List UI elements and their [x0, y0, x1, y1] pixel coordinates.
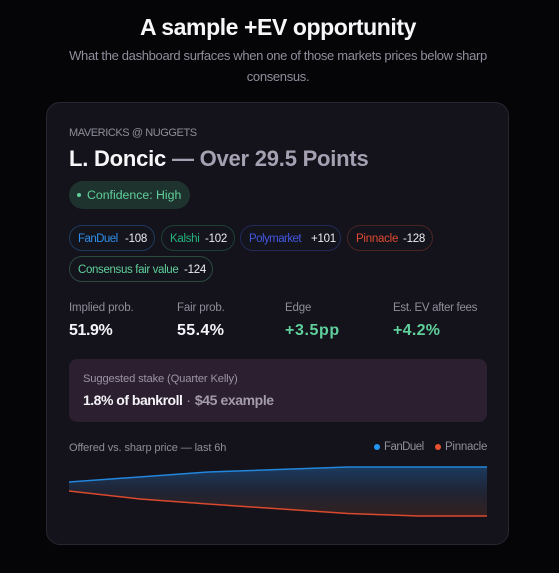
line chart [69, 466, 487, 517]
stat: implied probability [69, 302, 134, 339]
confidence text: Confidence: High [87, 188, 181, 202]
pill: Polymarket price: Polymarket [249, 233, 301, 245]
stat: edge: +3.5pp [285, 322, 340, 339]
chart caption: Offered vs. sharp price — last 6h [69, 442, 226, 454]
FanDuel line [69, 467, 487, 482]
panel: suggested stake [69, 359, 487, 422]
pill: consensus fair value: Consensus fair value [78, 264, 178, 276]
legend: Pinnacle: Pinnacle [445, 441, 487, 453]
pill: Kalshi price: Kalshi [170, 233, 200, 245]
stat: implied probability: 51.9% [69, 322, 112, 339]
stake label: Suggested stake (Quarter Kelly) [83, 373, 238, 385]
stat: fair probability [177, 302, 225, 339]
pill: Kalshi price: -102 [205, 233, 227, 245]
player prop heading: L. Doncic — Over 29.5 Points [69, 146, 369, 171]
stake value: 1.8% of bankroll · $45 example [83, 392, 274, 408]
confidence dot [77, 193, 81, 197]
confidence badge [69, 181, 190, 209]
pill: consensus fair value [69, 256, 213, 282]
legend: FanDuel: FanDuel [384, 441, 424, 453]
subtitle: consensus. [247, 69, 309, 84]
stat: estimated EV: Est. EV after fees [393, 302, 477, 314]
matchup label: MAVERICKS @ NUGGETS [69, 127, 197, 139]
pill: consensus fair value: -124 [184, 264, 206, 276]
pill: Pinnacle price: -128 [403, 233, 425, 245]
legend [374, 441, 487, 453]
pill: Pinnacle price: Pinnacle [356, 233, 398, 245]
pill: FanDuel price [69, 225, 155, 251]
subtitle [69, 48, 487, 84]
pill: Polymarket price [240, 225, 341, 251]
panel: opportunity card [46, 102, 509, 545]
area between lines [69, 467, 487, 516]
stat: edge: Edge [285, 302, 311, 314]
pill: FanDuel price: FanDuel [78, 233, 118, 245]
pill: Pinnacle price [347, 225, 433, 251]
stat: implied probability: Implied prob. [69, 302, 134, 314]
stat: estimated EV: +4.2% [393, 322, 440, 339]
stat: estimated EV [393, 302, 477, 339]
stat: fair probability: 55.4% [177, 322, 224, 339]
pill: Polymarket price: +101 [311, 233, 336, 245]
pill: Kalshi price [161, 225, 235, 251]
pill: FanDuel price: -108 [125, 233, 147, 245]
subtitle: What the dashboard surfaces when one of those markets prices below sharp [69, 48, 487, 63]
title: A sample +EV opportunity [140, 14, 416, 40]
stat: edge [285, 302, 340, 339]
Pinnacle line [69, 491, 487, 516]
stat: fair probability: Fair prob. [177, 302, 225, 314]
